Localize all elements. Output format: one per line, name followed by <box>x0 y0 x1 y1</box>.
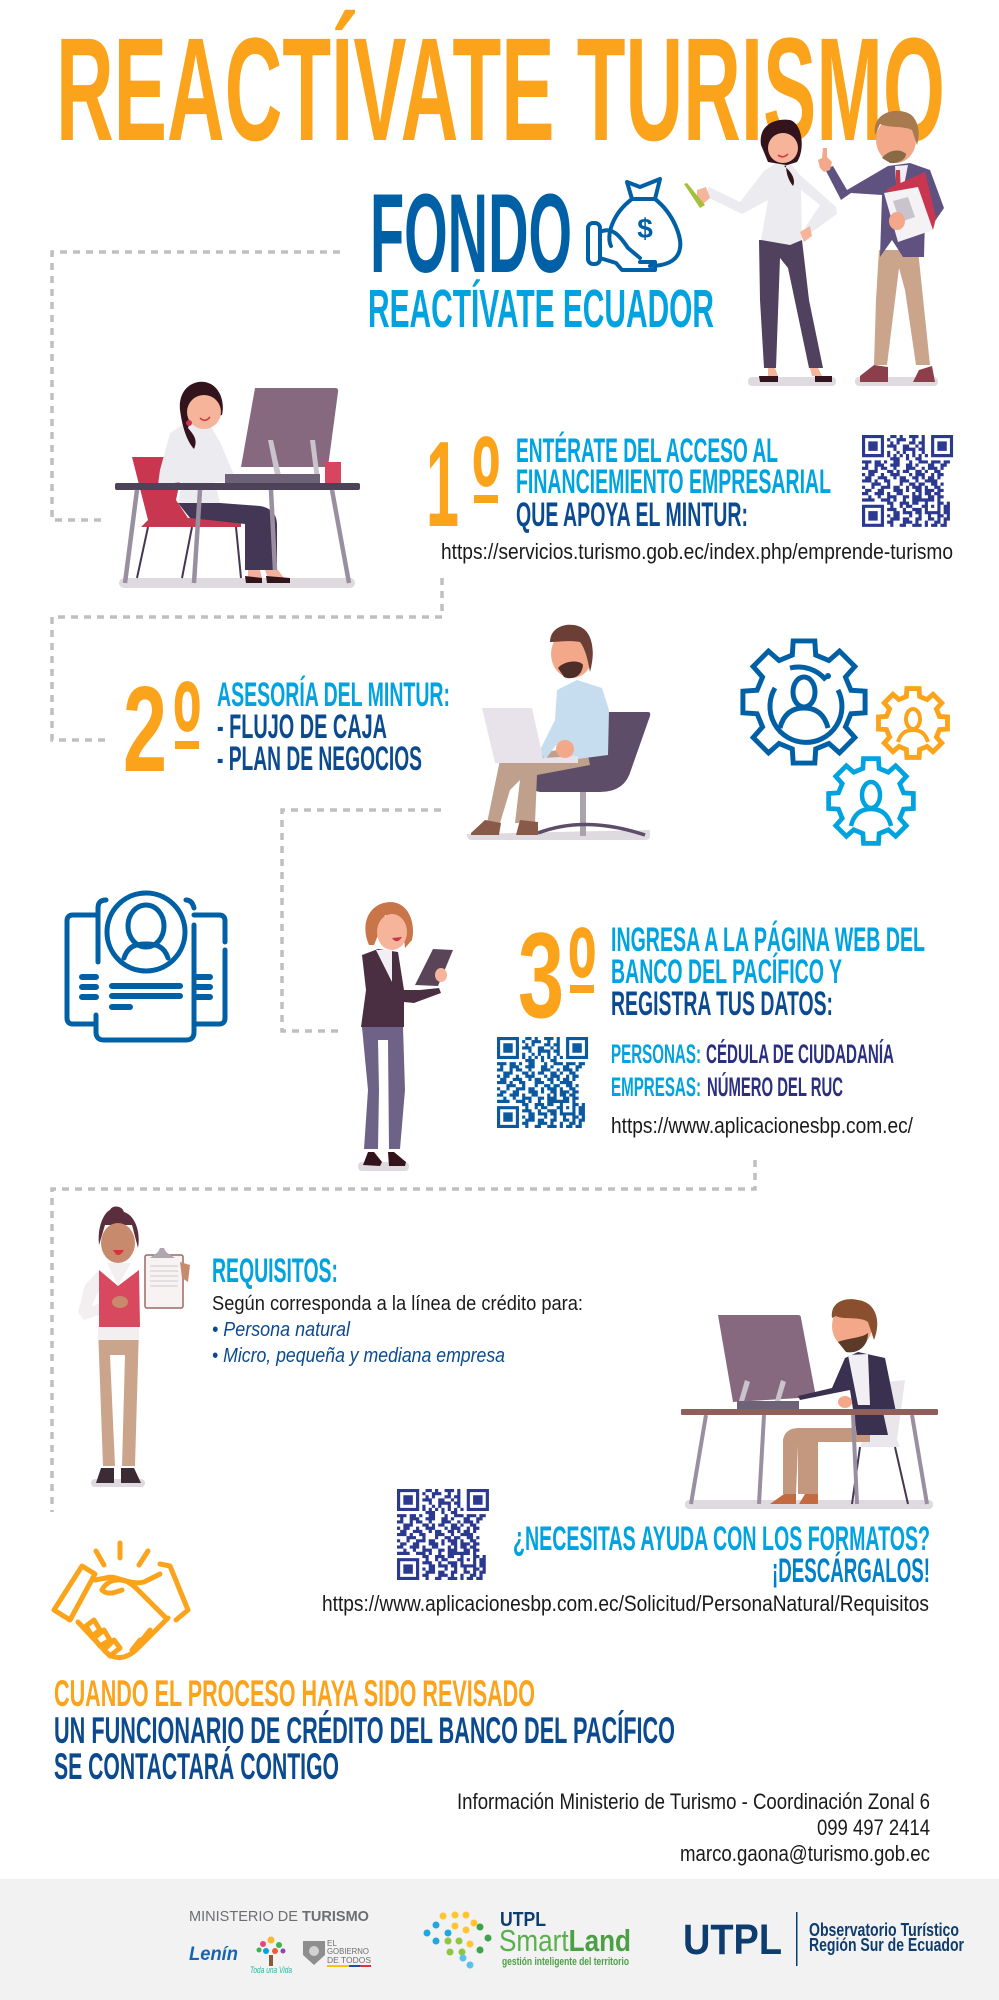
step 1 number: º <box>472 404 500 572</box>
step 3 number: º <box>568 895 596 1063</box>
illustration: woman and man talking <box>684 111 944 386</box>
icon: gears with people <box>743 641 947 843</box>
subtitle: Reactívate Ecuador: REACTÍVATE ECUADOR <box>368 279 714 339</box>
step 3 link: https://www.aplicacionesbp.com.ec/ <box>611 1113 914 1138</box>
monitor <box>241 388 338 467</box>
registration data: PERSONAS: <box>611 1039 701 1069</box>
connector: dashed line from step 2 to step 3 <box>282 810 441 1031</box>
closing message <box>54 1673 675 1787</box>
legs <box>783 1428 870 1494</box>
logo: SmartLand: UTPL <box>500 1909 546 1931</box>
feet <box>248 570 284 578</box>
QR code step 1 <box>862 435 953 527</box>
jacket <box>798 1352 896 1435</box>
step 3 heading <box>611 921 925 1023</box>
connector: dashed line from step 3 to requirements <box>52 1160 755 1512</box>
brain dots <box>424 1912 492 1968</box>
contact information <box>457 1789 930 1866</box>
closing message: SE CONTACTARÁ CONTIGO <box>54 1746 339 1787</box>
requirements: • Persona natural <box>212 1319 350 1341</box>
QR code formats <box>397 1489 489 1580</box>
man documents <box>887 172 936 230</box>
step 3 heading: REGISTRA TUS DATOS: <box>611 985 833 1023</box>
logo: UTPL Observatorio: UTPL <box>683 1916 782 1964</box>
logo: Lenín: Lenín <box>189 1944 238 1965</box>
icon: profile document <box>67 893 225 1040</box>
step 2 heading: ASESORÍA DEL MINTUR: <box>217 676 450 714</box>
woman hair and face <box>761 120 802 186</box>
text: FONDO <box>370 171 572 296</box>
logo: tree: Toda una Vida <box>250 1965 292 1975</box>
illustration: woman with clipboard <box>78 1206 190 1487</box>
hair and face <box>180 382 223 449</box>
man head <box>876 117 916 163</box>
man pants and shoes <box>874 250 930 365</box>
legs <box>487 745 590 823</box>
laptop <box>482 708 578 763</box>
clipboard <box>145 1255 183 1308</box>
logo: El Gobierno de Todos: DE TODOS <box>327 1956 371 1965</box>
tablet <box>415 949 453 986</box>
logo: El Gobierno de Todos: EL <box>327 1939 337 1948</box>
body <box>78 1270 113 1320</box>
head <box>365 902 413 948</box>
shirt <box>158 420 237 503</box>
chair <box>132 457 241 527</box>
registration data: EMPRESAS: <box>611 1072 701 1102</box>
cyan gear <box>829 759 913 843</box>
contact information: marco.gaona@turismo.gob.ec <box>680 1841 930 1866</box>
logo: El Gobierno de Todos: GOBIERNO <box>327 1947 369 1956</box>
illustration: woman at desk <box>115 382 360 588</box>
contact information: 099 497 2414 <box>817 1815 930 1840</box>
logo: UTPL Observatorio: Observatorio Turístico <box>809 1920 959 1940</box>
requirements: Según corresponda a la línea de crédito para: <box>212 1293 583 1315</box>
icon: money bag on hand <box>588 179 680 270</box>
step 2 heading: - FLUJO DE CAJA <box>217 708 387 746</box>
QR code step 3 <box>497 1037 588 1128</box>
illustration: man with laptop in armchair <box>467 625 650 840</box>
logo: SmartLand <box>424 1909 631 1968</box>
desk <box>681 1409 938 1415</box>
logo: SmartLand: gestión inteligente del territorio <box>502 1956 629 1968</box>
step 2 heading <box>217 676 450 778</box>
requirements: REQUISITOS: <box>212 1252 338 1290</box>
logo: UTPL Observatorio <box>683 1912 964 1966</box>
registration data: NÚMERO DEL RUC <box>707 1071 843 1102</box>
step 2 number: 2 <box>123 661 167 797</box>
step 3 number: 3 <box>518 907 564 1043</box>
woman shirt <box>705 163 837 245</box>
pants <box>178 503 277 570</box>
head <box>99 1206 139 1248</box>
chair <box>860 1380 905 1447</box>
monitor <box>718 1315 816 1402</box>
connector: dashed line from step 1 to step 2 <box>52 578 442 740</box>
step 2 heading: - PLAN DE NEGOCIOS <box>217 740 422 778</box>
logo: tree <box>250 1936 292 1975</box>
pants <box>362 1027 405 1149</box>
requirements <box>212 1252 583 1367</box>
desk <box>115 483 360 490</box>
illustration: woman with tablet <box>358 902 453 1171</box>
connector: dashed line from fund logo to step 1 <box>52 252 340 520</box>
logo: Ministerio de Turismo: MINISTERIO DE TURISMO <box>189 1908 369 1925</box>
shirt <box>540 680 609 760</box>
logo: SmartLand: SmartLand <box>499 1923 631 1958</box>
icon: handshake <box>54 1543 188 1658</box>
man jacket <box>825 163 944 257</box>
head <box>551 630 593 678</box>
armchair <box>515 712 650 792</box>
step 1 heading: ENTÉRATE DEL ACCESO AL <box>516 432 778 470</box>
step 1 heading: QUE APOYA EL MINTUR: <box>516 496 748 534</box>
footer band <box>0 1879 999 2000</box>
orange gear <box>879 689 947 757</box>
step 1 number: 1 <box>426 416 459 552</box>
step 2 number: º <box>173 649 201 817</box>
icon: money bag on hand: $ <box>637 213 653 244</box>
closing message: CUANDO EL PROCESO HAYA SIDO REVISADO <box>54 1673 535 1714</box>
jacket <box>361 949 441 1027</box>
woman pants <box>759 240 823 368</box>
help heading <box>513 1520 930 1590</box>
registration data <box>611 1038 894 1102</box>
big blue gear <box>743 641 865 763</box>
requirements: • Micro, pequeña y mediana empresa <box>212 1345 505 1367</box>
woman feet <box>768 368 822 376</box>
step 1 heading <box>516 432 831 534</box>
pants <box>98 1327 139 1466</box>
logo: Ministerio de Turismo <box>189 1908 371 1975</box>
head <box>832 1303 872 1349</box>
logo: El Gobierno de Todos <box>303 1939 371 1967</box>
illustration: man at desk <box>681 1299 938 1509</box>
